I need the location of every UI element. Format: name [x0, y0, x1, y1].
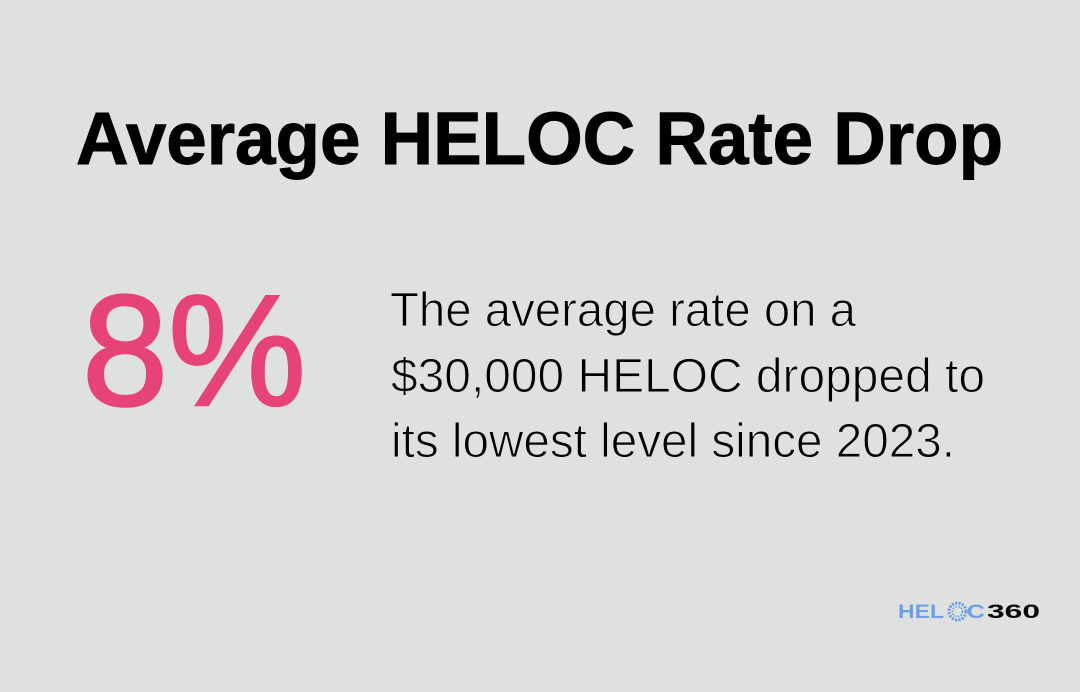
description text block	[390, 284, 985, 468]
description text block: its lowest level since 2023.	[391, 415, 955, 468]
logo wordmark: HELOC	[898, 602, 985, 623]
logo wordmark: 360: 360	[987, 602, 1040, 623]
description text block: $30,000 HELOC dropped to	[391, 350, 985, 403]
title: Average HELOC Rate Drop	[76, 97, 1003, 180]
logo wordmark: HELOC: O C	[947, 602, 985, 623]
logo: HELOC360	[898, 602, 1040, 623]
logo wordmark: HELOC: HEL	[898, 602, 944, 623]
description text block: The average rate on a	[390, 284, 856, 337]
logo icon: swirl O	[949, 603, 966, 620]
big statistic: 8%: 8%	[82, 263, 306, 439]
